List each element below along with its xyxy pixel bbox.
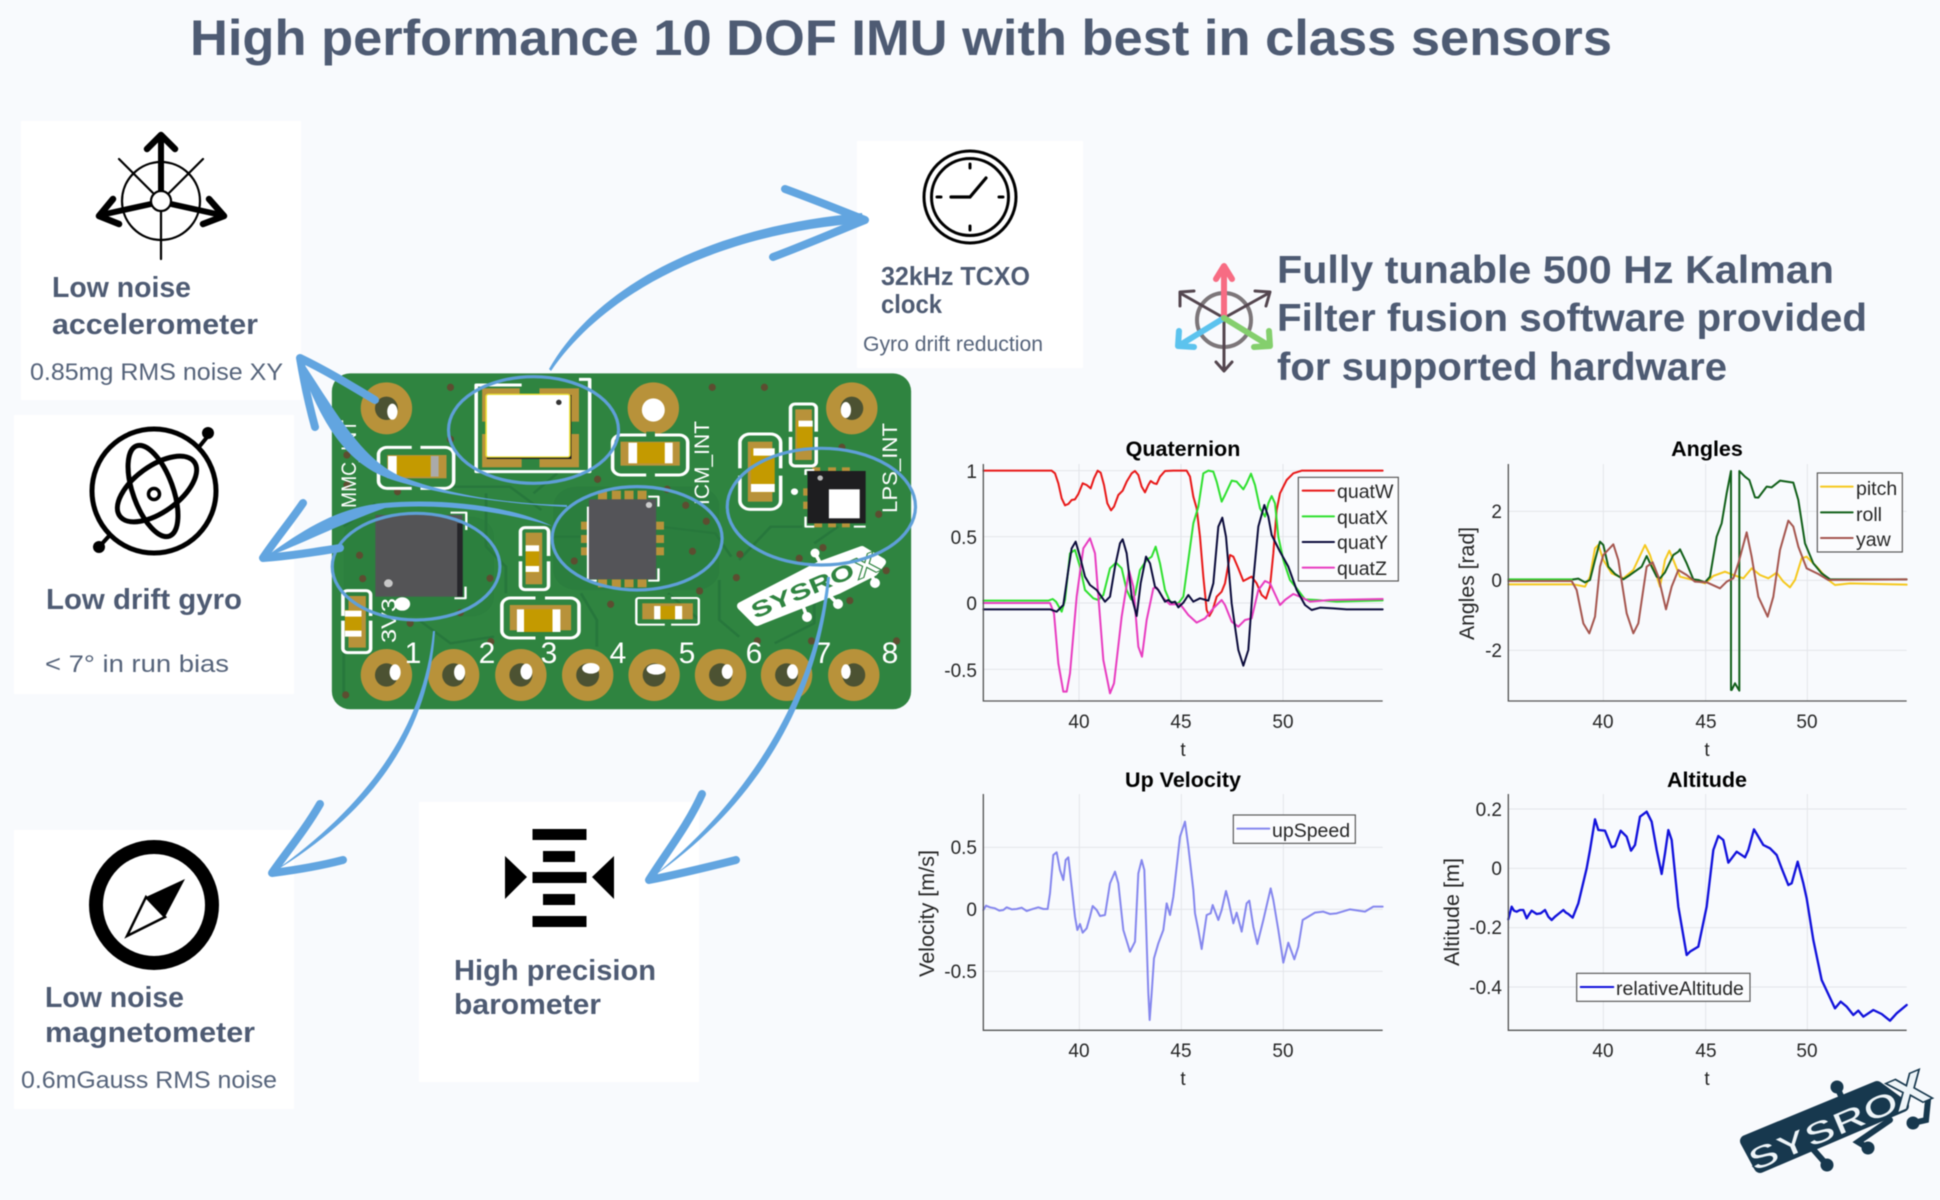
spec: magnetometer noise: 0.6mGauss RMS noise [21, 1067, 277, 1094]
spec: accelerometer noise: 0.85mg RMS noise XY [30, 359, 283, 386]
icon: accelerometer axes [99, 135, 224, 259]
chart: Angles: 50 [1796, 712, 1818, 733]
chart: Altitude: 50 [1796, 1041, 1818, 1062]
chart: Up Velocity: 40 [1068, 1041, 1090, 1062]
board silkscreen labels: 3V3 [378, 598, 401, 643]
board pin numbers [405, 637, 898, 670]
board silkscreen labels: LPS_INT [879, 423, 902, 513]
chart: Altitude: 0 [1491, 859, 1502, 880]
chart: Quaternion: quatZ [1337, 558, 1387, 580]
arrow: barometer chip to barometer [649, 577, 830, 880]
board pin numbers: 6 [746, 637, 762, 670]
heading: accelerometer: Low noise [52, 272, 191, 304]
chart: Up Velocity: 0.5 [951, 838, 977, 859]
chart title: Angles [1671, 437, 1743, 461]
chart: Altitude: 0.2 [1476, 800, 1502, 821]
chart title: Up Velocity [1125, 768, 1241, 792]
board logo: X [848, 546, 885, 586]
board logo: SYSRO [747, 558, 858, 624]
chart: Altitude: 40 [1592, 1041, 1614, 1062]
panel: barometer [419, 802, 699, 1082]
chart: Angles: 2 [1491, 502, 1502, 523]
LPS chip [791, 467, 866, 527]
chart: Up Velocity: 50 [1272, 1041, 1294, 1062]
board pin numbers: 1 [405, 637, 421, 670]
chart: Up Velocity: upSpeed [1272, 820, 1350, 842]
text block: kalman filter: for supported hardware [1277, 346, 1727, 389]
heading: magnetometer: Low noise [45, 982, 184, 1014]
heading line: magnetometer: magnetometer [45, 1017, 255, 1049]
icon: gyroscope [92, 427, 216, 553]
chart: Quaternion: t [1180, 740, 1186, 761]
heading line: accelerometer: accelerometer [52, 309, 258, 341]
panel: gyro [14, 415, 294, 694]
panel: accelerometer [21, 121, 301, 400]
spec: clock: Gyro drift reduction [863, 333, 1043, 356]
chart: Angles: -2 [1485, 641, 1502, 662]
board pin numbers: 3 [541, 637, 557, 670]
icon: kalman fusion axes [1178, 266, 1270, 371]
chart: Angles: 0 [1491, 571, 1502, 592]
board pin numbers: 7 [815, 637, 831, 670]
board pin numbers: 8 [882, 637, 898, 670]
icon: compass [96, 847, 212, 963]
chart: Altitude [1441, 768, 1907, 1090]
spec: gyro bias: < 7° in run bias [45, 651, 229, 678]
chart: Quaternion: 0 [966, 594, 977, 615]
title: High performance 10 DOF IMU with best in class sensors [190, 10, 1612, 66]
logo: SYSROX: X [1883, 1062, 1935, 1121]
logo: SYSROX: SYSRO [1743, 1083, 1904, 1178]
sensor highlight ellipses [332, 377, 915, 620]
arrow: gyro chip to gyro [263, 501, 552, 558]
chart: Altitude: relativeAltitude [1616, 978, 1744, 1000]
panel: magnetometer [14, 830, 294, 1109]
capacitors [339, 404, 820, 653]
chart: Quaternion [944, 437, 1398, 761]
chart: Up Velocity: -0.5 [944, 962, 977, 983]
text block: kalman filter: Filter fusion software provided [1277, 297, 1867, 340]
chart: Angles: yaw [1856, 529, 1892, 551]
icon: clock [924, 151, 1016, 243]
vias [342, 384, 900, 699]
chart: Quaternion: 40 [1068, 712, 1090, 733]
chart: Angles: 45 [1695, 712, 1717, 733]
ICM chip [581, 491, 664, 587]
chart: Altitude: 45 [1695, 1041, 1717, 1062]
text block: kalman filter: Fully tunable 500 Hz Kalman [1277, 249, 1834, 292]
chart: Angles: Angles [rad] [1456, 527, 1479, 640]
mounting and header holes [361, 382, 879, 701]
chart: Angles: roll [1856, 504, 1882, 526]
arrow: magnetometer chip to magnetometer [272, 631, 435, 873]
board pin numbers: 5 [679, 637, 695, 670]
chart: Up Velocity: 45 [1170, 1041, 1192, 1062]
chart: Quaternion: quatX [1337, 507, 1388, 529]
arrow: accelerometer chip to accelerometer [298, 358, 567, 507]
heading: barometer: High precision [454, 955, 656, 987]
chart: Quaternion: -0.5 [944, 661, 977, 682]
chart: Altitude: t [1704, 1069, 1710, 1090]
PCB board [332, 373, 915, 709]
chart: Up Velocity: t [1180, 1069, 1186, 1090]
chart: Angles: 40 [1592, 712, 1614, 733]
chart: Up Velocity [916, 768, 1383, 1090]
TCXO oscillator [476, 379, 590, 472]
heading: gyro: Low drift gyro [46, 584, 242, 616]
icon: barometer [505, 829, 614, 927]
panel: clock [857, 141, 1083, 368]
chart: Angles [1456, 437, 1907, 761]
chart: Quaternion: quatY [1337, 532, 1388, 554]
chart: Quaternion: 0.5 [951, 528, 977, 549]
chart: Quaternion: 45 [1170, 712, 1192, 733]
heading line: barometer: barometer [454, 989, 601, 1021]
chart: Quaternion: quatW [1337, 481, 1394, 503]
chart: Quaternion: 1 [966, 462, 977, 483]
heading line: clock: clock [881, 289, 942, 319]
chart title: Quaternion [1126, 437, 1240, 461]
chart title: Altitude [1667, 768, 1747, 792]
board pin numbers: 2 [479, 637, 495, 670]
chart: Altitude: Altitude [m] [1441, 858, 1464, 966]
board silkscreen labels: MMC_INT [338, 420, 361, 508]
arrow: TCXO to clock [549, 189, 865, 371]
chart: Altitude: -0.4 [1469, 978, 1502, 999]
chart: Up Velocity: Velocity [m/s] [916, 850, 939, 977]
logo: SYSROX [1743, 1062, 1935, 1178]
board pin numbers: 4 [610, 637, 626, 670]
text block: kalman filter [1277, 249, 1867, 389]
heading: clock: 32kHz TCXO [881, 261, 1030, 291]
chart: Altitude: -0.2 [1469, 918, 1502, 939]
chart: Angles: t [1704, 740, 1710, 761]
board logo [741, 546, 885, 624]
chart: Up Velocity: 0 [966, 900, 977, 921]
chart: Quaternion: 50 [1272, 712, 1294, 733]
chart: Angles: pitch [1856, 478, 1897, 500]
MMC chip [375, 513, 466, 598]
board silkscreen labels [338, 420, 902, 643]
board silkscreen labels: ICM_INT [691, 421, 714, 505]
